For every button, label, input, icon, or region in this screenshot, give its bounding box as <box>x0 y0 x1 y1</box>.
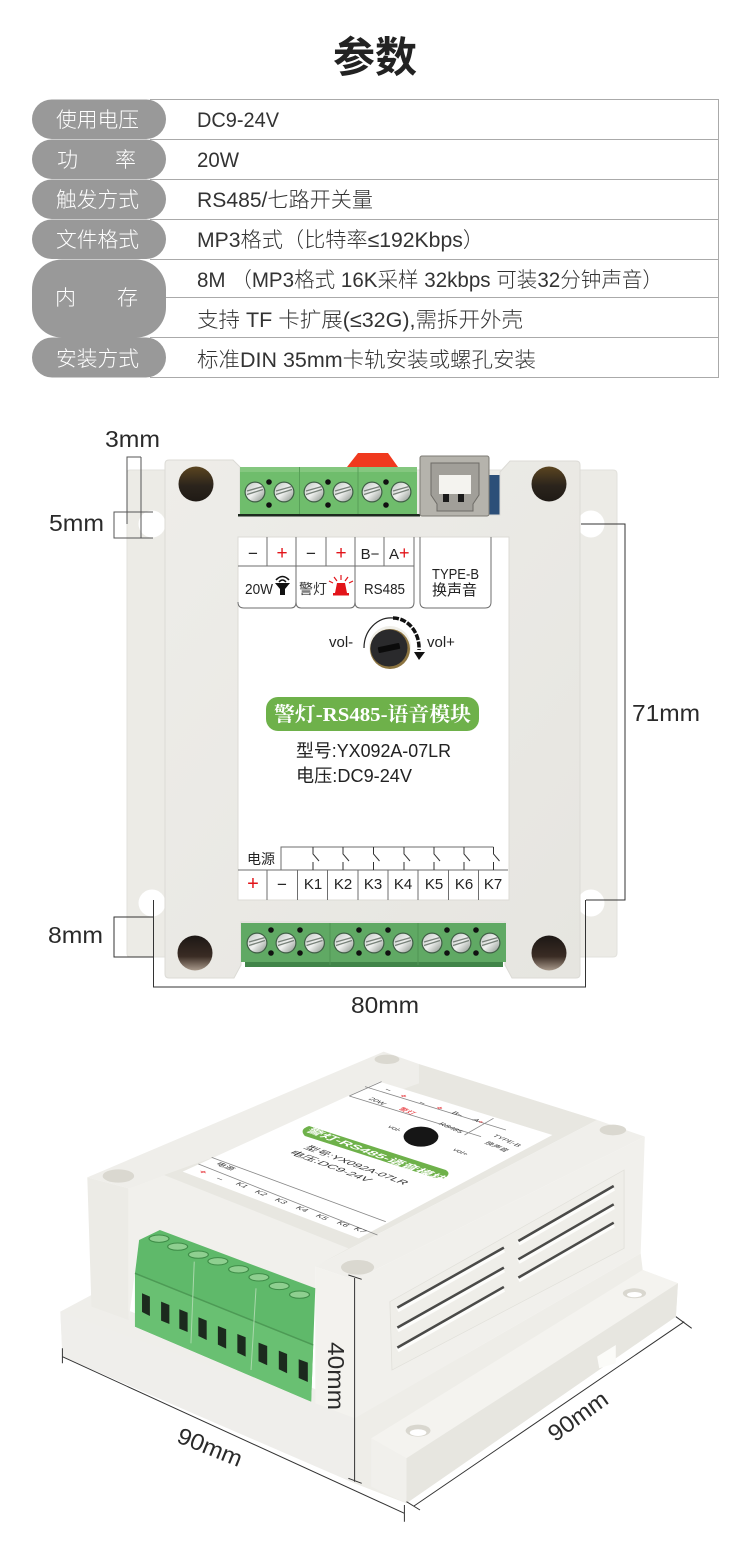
inner wall <box>129 1175 348 1320</box>
dimension: 3mm <box>105 426 160 538</box>
isometric label text: K1 <box>233 1181 251 1189</box>
green product name badge: 警灯-RS485-语音模块 <box>274 703 471 726</box>
volume knob: vol- <box>329 634 353 651</box>
dimension: 40mm <box>323 1275 362 1483</box>
base plate <box>60 1253 678 1503</box>
row label: trigger <box>32 180 166 219</box>
body right face <box>355 1137 645 1418</box>
vent recess <box>390 1170 624 1370</box>
USB type-B socket <box>420 456 489 516</box>
isometric label text: K3 <box>272 1197 290 1205</box>
isometric label surface <box>183 1082 552 1238</box>
vent slots <box>397 1186 614 1350</box>
module body <box>165 460 580 978</box>
row label: voltage: 使用电压 <box>56 109 139 132</box>
row label: mounting <box>32 338 166 378</box>
model text: 型号:YX092A-07LR <box>296 741 451 761</box>
isometric label text: 型号:YX092A-07LR <box>300 1144 412 1186</box>
connector legend grid: − <box>306 544 316 563</box>
isometric label text <box>195 1087 524 1234</box>
value: memory expansion: 支持 TF 卡扩展(≤32G),需拆开外壳 <box>197 309 523 332</box>
corner screw holes <box>178 466 566 970</box>
isometric label text: 换声音 <box>482 1140 511 1153</box>
icon: red beacon <box>329 575 353 596</box>
power and switch wiring legend <box>238 847 508 900</box>
isometric label text: vol+ <box>450 1147 471 1156</box>
dimension: right 90mm: 90mm <box>543 1386 613 1447</box>
blue circuit board <box>486 475 500 515</box>
value: power: 20W <box>197 149 239 172</box>
red beacon connector <box>347 453 398 467</box>
isometric label text: − <box>381 1087 395 1093</box>
isometric label text: K6 <box>334 1220 352 1228</box>
dimension: 8mm <box>48 917 153 957</box>
isometric label text: + <box>195 1169 211 1176</box>
isometric label text: + <box>432 1105 447 1112</box>
row label: memory <box>32 260 166 338</box>
green badge on label <box>303 1126 449 1179</box>
value: trigger: RS485/七路开关量 <box>197 189 373 212</box>
power and switch wiring legend: K5 <box>425 876 443 893</box>
isometric label text: K4 <box>293 1205 311 1213</box>
rail screw recesses <box>103 1055 626 1275</box>
volume knob: vol+ <box>427 634 455 651</box>
title: 参数 <box>333 24 417 85</box>
row label: file format <box>32 220 166 259</box>
knob on label <box>404 1127 438 1147</box>
power and switch wiring legend: K6 <box>455 876 473 893</box>
dimension: 80mm <box>154 900 586 1018</box>
connector legend grid <box>238 537 491 608</box>
row label: memory: 存 <box>117 287 138 310</box>
isometric view of module <box>60 1052 692 1522</box>
isometric green terminal block <box>135 1230 315 1402</box>
left pillar <box>87 1177 129 1320</box>
power and switch wiring legend: K1 <box>304 876 322 893</box>
dimension: left 90mm: 90mm <box>174 1422 246 1472</box>
connector legend grid: + <box>276 543 288 564</box>
voltage text: 电压:DC9-24V <box>296 766 412 786</box>
base plate <box>127 470 617 957</box>
corner pillar <box>315 1267 355 1418</box>
dimension: 71mm: 71mm <box>632 700 700 726</box>
isometric label text: vol- <box>385 1124 405 1133</box>
power and switch wiring legend: 电源 <box>247 851 275 867</box>
top rear rail <box>87 1052 419 1188</box>
isometric label text: 电压:DC9-24V <box>285 1149 377 1184</box>
power and switch wiring legend: K2 <box>334 876 352 893</box>
parameter table <box>32 100 718 378</box>
isometric label text: 20W <box>366 1096 389 1106</box>
connector legend grid: RS485 <box>364 581 405 598</box>
power and switch wiring legend: + <box>247 873 259 895</box>
dimension: 5mm: 5mm <box>49 510 104 536</box>
connector legend grid: TYPE-B <box>432 566 479 583</box>
icon: speaker lamp <box>275 576 290 595</box>
row label: memory: 内 <box>55 287 76 310</box>
dimension: 3mm: 3mm <box>105 426 160 452</box>
top view of module <box>127 453 617 978</box>
dimension: 71mm <box>581 524 700 900</box>
volume knob <box>329 618 455 669</box>
row label: trigger: 触发方式 <box>56 189 139 212</box>
isometric label text: − <box>415 1100 429 1106</box>
connector legend grid: A+ <box>389 543 410 563</box>
isometric label text: 警灯-RS485-语音模块 <box>302 1127 452 1183</box>
isometric label text: − <box>212 1176 227 1183</box>
power and switch wiring legend: − <box>277 875 287 894</box>
isometric label text: K7 <box>351 1226 369 1234</box>
isometric label text: K5 <box>313 1213 331 1221</box>
recessed top surface <box>129 1064 597 1267</box>
mounting holes in base plate <box>138 510 604 916</box>
bottom green terminal block <box>241 923 506 967</box>
connector legend grid: 警灯 <box>299 581 327 597</box>
top green terminal block <box>238 467 420 516</box>
value: file format: MP3格式（比特率≤192Kbps） <box>197 229 484 252</box>
dimension: 80mm: 80mm <box>351 992 419 1018</box>
isometric label text: RS485 <box>436 1121 466 1134</box>
connector legend grid: 20W <box>245 582 273 598</box>
connector legend grid: B− <box>361 546 380 563</box>
green product name badge <box>266 697 479 731</box>
row label: file format: 文件格式 <box>56 229 139 252</box>
isometric label text: + <box>396 1093 411 1100</box>
top front rail <box>315 1120 645 1280</box>
value: mounting: 标准DIN 35mm卡轨安装或螺孔安装 <box>197 349 536 372</box>
isometric label text: TYPE-B <box>490 1133 524 1148</box>
power and switch wiring legend: K4 <box>394 876 412 893</box>
power and switch wiring legend: K3 <box>364 876 382 893</box>
isometric label text: K2 <box>252 1189 270 1197</box>
power and switch wiring legend: K7 <box>484 876 502 893</box>
value: memory size: 8M （MP3格式 16K采样 32kbps 可装32分钟声音） <box>197 269 663 292</box>
row label: power <box>32 140 166 179</box>
isometric label text: A+ <box>470 1117 487 1125</box>
connector legend grid: 换声音 <box>432 581 477 599</box>
connector legend grid: − <box>248 544 258 563</box>
row label: mounting: 安装方式 <box>56 348 139 371</box>
value: voltage: DC9-24V <box>197 109 279 132</box>
row label: power: 功 <box>57 149 78 172</box>
dimension: 8mm: 8mm <box>48 922 103 948</box>
isometric label text: 电源 <box>213 1161 238 1172</box>
connector legend grid: + <box>335 543 347 564</box>
isometric label text: 警灯 <box>396 1106 418 1116</box>
isometric label text: B− <box>449 1110 466 1118</box>
dimension: 40mm: 40mm <box>323 1342 349 1410</box>
row label: voltage <box>32 100 166 139</box>
dimension: left 90mm <box>62 1348 404 1522</box>
row label: power: 率 <box>115 149 136 172</box>
white label panel <box>238 537 509 900</box>
dimension: 5mm <box>49 510 153 538</box>
dimension: right 90mm <box>406 1317 692 1510</box>
